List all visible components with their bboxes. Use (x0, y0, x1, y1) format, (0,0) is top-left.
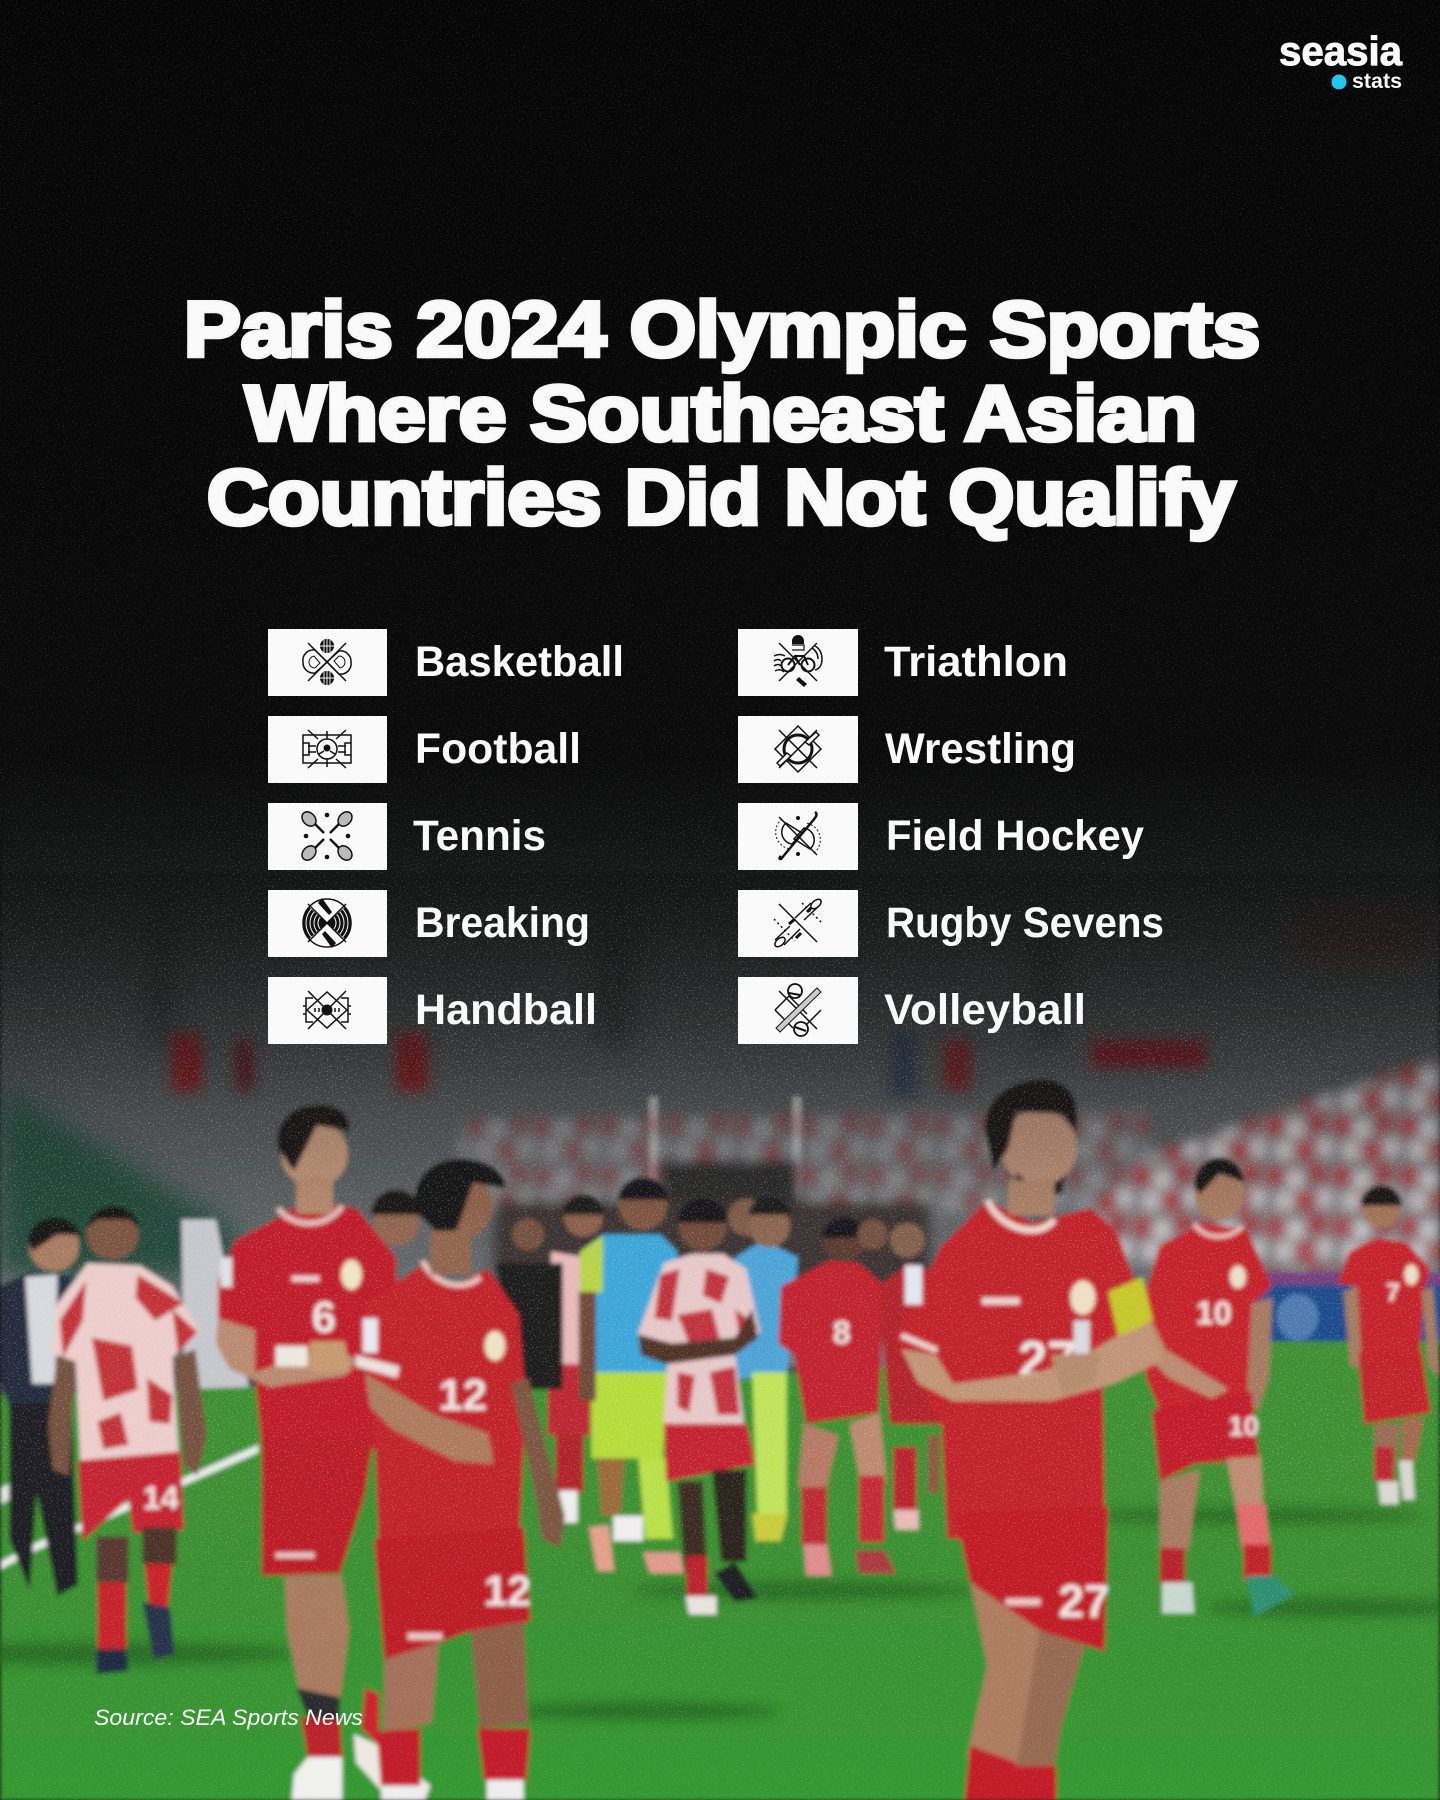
sport: field hockey (738, 803, 1144, 870)
icon: triathlon (774, 635, 822, 687)
captain number 27: 27 (1058, 1575, 1110, 1627)
player 10: 10 (1196, 1295, 1232, 1331)
far heads (373, 1200, 419, 1246)
logo: seasia stats: seasia (1279, 28, 1403, 74)
sport: wrestling: Wrestling (885, 725, 1076, 773)
player in red and white, far (549, 1252, 586, 1367)
sport: triathlon (738, 629, 1068, 696)
icon: breaking (303, 898, 351, 948)
player 10: 10 (1228, 1410, 1259, 1441)
icon: football (303, 730, 351, 768)
sport: breaking (268, 890, 590, 957)
title (184, 285, 1260, 541)
player 10 (1143, 1157, 1295, 1617)
captain number 27: 27 (1018, 1331, 1077, 1390)
stand crowd (172, 1033, 1440, 1338)
player 14 in white and red (48, 1206, 207, 1674)
coach (0, 1217, 82, 1596)
led board (1252, 1272, 1440, 1344)
icon: volleyball (775, 984, 821, 1036)
player 12: 12 (484, 1568, 531, 1615)
sport: breaking: Breaking (415, 899, 590, 947)
sport: handball: Handball (415, 986, 597, 1034)
sport: football (268, 716, 581, 783)
sport: volleyball (738, 977, 1086, 1044)
icon: rugby sevens (773, 897, 823, 949)
icon: basketball (303, 639, 351, 685)
player 6: 6 (312, 1294, 336, 1342)
captain number 27 (896, 1079, 1162, 1800)
icon: handball (303, 991, 351, 1029)
white panels (181, 1220, 258, 1453)
pitch (0, 1341, 1440, 1800)
sport: rugby sevens (738, 890, 1164, 957)
second blue (735, 1240, 798, 1378)
logo dot (1332, 74, 1346, 90)
icon: tennis (299, 809, 355, 863)
player 12 (356, 1159, 565, 1800)
player 7 (1338, 1185, 1440, 1504)
sport: tennis: Tennis (413, 812, 546, 860)
background team group: 8 (833, 1315, 851, 1351)
sport: tennis (268, 803, 546, 870)
player in white and red with arms crossed (637, 1254, 760, 1424)
player 12: 12 (439, 1372, 487, 1420)
sport: basketball (268, 629, 624, 696)
sport: football: Football (415, 725, 581, 773)
player red second behind (878, 1263, 944, 1424)
icon: field hockey (776, 812, 820, 859)
sport: triathlon: Triathlon (884, 638, 1068, 686)
sport: volleyball: Volleyball (884, 986, 1086, 1034)
sport: basketball: Basketball (415, 638, 624, 686)
source note: Source: SEA Sports News (94, 1705, 363, 1730)
player 6 (216, 1104, 431, 1800)
sport: field hockey: Field Hockey (886, 812, 1144, 860)
title: Paris 2024 Olympic Sports (184, 285, 1260, 373)
stadium stands (0, 873, 1440, 1367)
background team group (371, 1177, 944, 1615)
title: Countries Did Not Qualify (207, 453, 1235, 541)
sport: handball (268, 977, 597, 1044)
player 14 in white and red: 14 (143, 1480, 179, 1516)
icon: wrestling (775, 726, 821, 772)
sport: wrestling (738, 716, 1076, 783)
stronger grain over stands (0, 805, 1440, 1798)
player with blue vest (580, 1234, 678, 1378)
player 7: 7 (1386, 1279, 1400, 1307)
logo: seasia stats: stats (1352, 70, 1402, 93)
title: Where Southeast Asian (245, 369, 1197, 457)
player 8 red (779, 1261, 884, 1424)
sport: rugby sevens: Rugby Sevens (886, 899, 1164, 947)
